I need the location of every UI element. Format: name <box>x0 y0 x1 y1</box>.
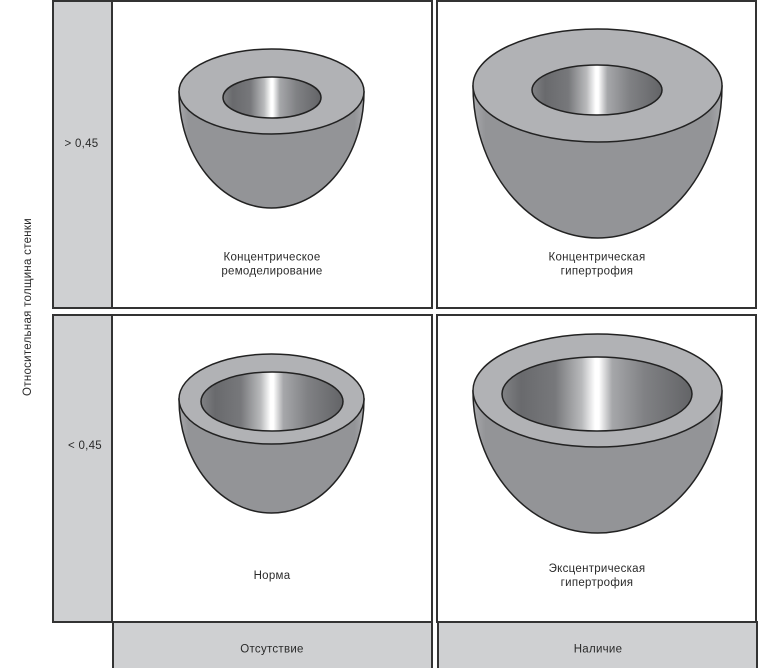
column header: present: Наличие <box>574 644 622 656</box>
row header: greater than 0.45: > 0,45 <box>65 138 98 150</box>
panel: eccentric hypertrophy <box>437 315 756 622</box>
y-axis title: Относительная толщина стенки <box>22 218 34 396</box>
icon: concentric hypertrophy bowl <box>473 29 722 238</box>
icon: eccentric hypertrophy bowl <box>473 334 722 533</box>
panel: normal <box>112 315 432 622</box>
label: concentric remodeling: Концентрическое <box>223 252 321 264</box>
column header: absent: Отсутствие <box>240 644 304 656</box>
label: concentric hypertrophy: гипертрофия <box>561 266 633 278</box>
icon: concentric remodeling bowl <box>179 49 364 208</box>
label: concentric remodeling: ремоделирование <box>221 266 323 278</box>
column header: absent <box>113 622 432 668</box>
row header: less than 0.45: < 0,45 <box>68 440 102 452</box>
panel: concentric hypertrophy <box>437 1 756 308</box>
icon: normal bowl <box>179 354 364 513</box>
row header: less than 0.45 <box>53 315 112 622</box>
row header: greater than 0.45 <box>53 1 112 308</box>
panel: concentric remodeling <box>112 1 432 308</box>
label: eccentric hypertrophy: Эксцентрическая <box>549 563 645 575</box>
label: eccentric hypertrophy: гипертрофия <box>561 577 633 589</box>
column header: present <box>438 622 757 668</box>
label: normal: Норма <box>254 570 291 582</box>
label: concentric hypertrophy: Концентрическая <box>549 252 645 264</box>
